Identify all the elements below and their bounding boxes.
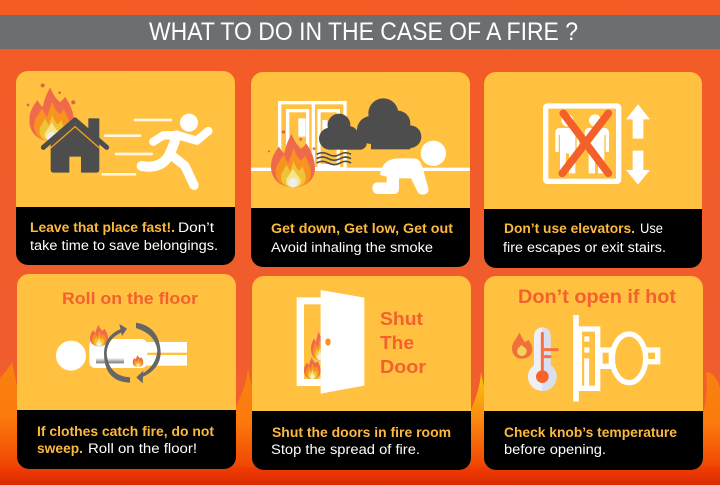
caption: Avoid inhaling the smoke	[271, 240, 433, 255]
title bar	[0, 15, 720, 49]
side label: Door	[380, 357, 426, 377]
caption: If clothes catch fire, do not	[37, 424, 215, 439]
caption: fire escapes or exit stairs.	[503, 240, 666, 255]
caption: sweep.	[37, 441, 83, 456]
heading: Roll on the floor	[62, 289, 198, 308]
caption	[503, 221, 666, 255]
caption	[504, 425, 677, 457]
panel: leave the place	[16, 71, 235, 265]
caption: Check knob’s temperature	[504, 425, 677, 440]
icon: crossed-out elevator	[546, 104, 650, 185]
caption: Get down, Get low, Get out	[271, 221, 454, 236]
panel: elevators	[484, 72, 702, 268]
side label: The	[380, 333, 414, 353]
side label	[380, 309, 426, 377]
icon: door knob	[576, 315, 658, 402]
panel: check the knob	[484, 276, 703, 470]
panel: roll on the floor	[17, 274, 236, 469]
heading: Don’t open if hot	[518, 287, 677, 308]
side label: Shut	[380, 309, 423, 329]
caption: Stop the spread of fire.	[271, 442, 420, 457]
caption: Leave that place fast!.	[30, 220, 175, 235]
caption	[30, 220, 218, 253]
caption: Use	[640, 221, 663, 236]
caption: Roll on the floor!	[88, 441, 197, 456]
caption: Shut the doors in fire room	[272, 425, 451, 440]
caption: take time to save belongings.	[30, 238, 218, 253]
icon: burning house and runner	[27, 83, 208, 185]
icon: person rolling	[56, 323, 187, 383]
caption: before opening.	[504, 442, 606, 457]
caption: Don’t	[178, 220, 214, 235]
caption: Don’t use elevators.	[504, 221, 635, 236]
icon: thermometer with flame	[512, 327, 557, 391]
icon: crawling person under smoke	[251, 98, 470, 195]
caption	[37, 424, 215, 456]
caption	[271, 425, 451, 457]
panel: get down	[251, 72, 470, 267]
title: WHAT TO DO IN THE CASE OF A FIRE ?	[149, 18, 578, 46]
caption	[271, 221, 454, 255]
panel: shut the door	[252, 276, 471, 470]
icon: open door with fire	[297, 290, 364, 394]
